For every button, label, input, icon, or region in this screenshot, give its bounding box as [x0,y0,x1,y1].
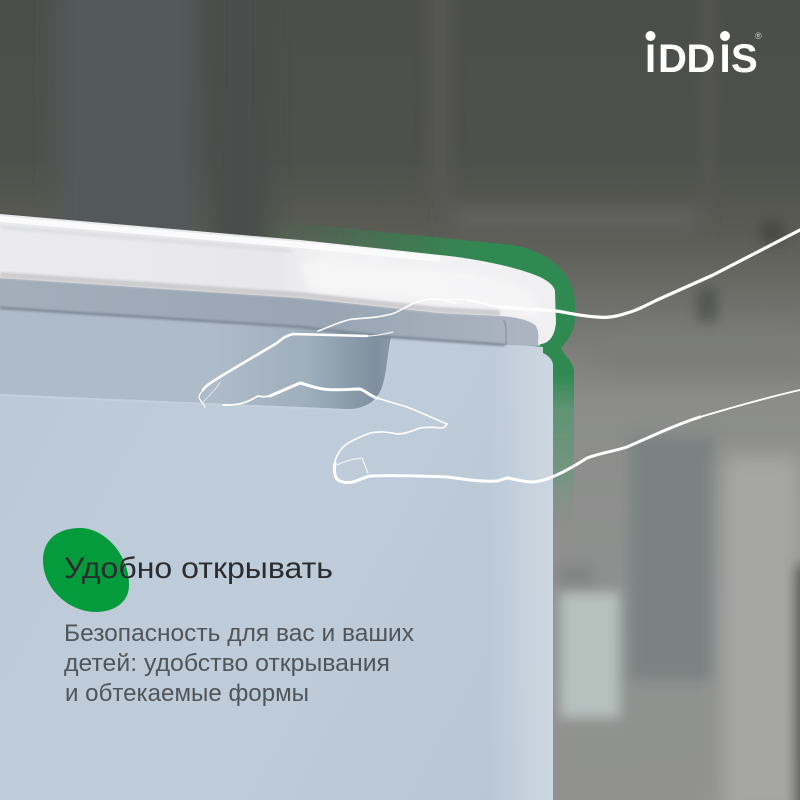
green glow outline behind product [316,226,575,500]
product: cistern body [0,300,553,800]
heading: Удобно открывать [64,552,333,585]
registered mark: ® [755,31,762,41]
description: и обтекаемые формы [65,680,309,707]
product: lid underside [0,270,540,346]
hand line drawing [199,230,800,483]
description: детей: удобство открывания [64,650,390,677]
text block [43,528,414,707]
logo [645,31,762,81]
product: white lid [0,214,556,345]
green blob behind heading [43,528,129,612]
description: Безопасность для вас и ваших [64,620,414,647]
description [64,620,414,707]
recessed finger notch [0,306,392,409]
logo wordmark: IDDIS [645,37,758,81]
